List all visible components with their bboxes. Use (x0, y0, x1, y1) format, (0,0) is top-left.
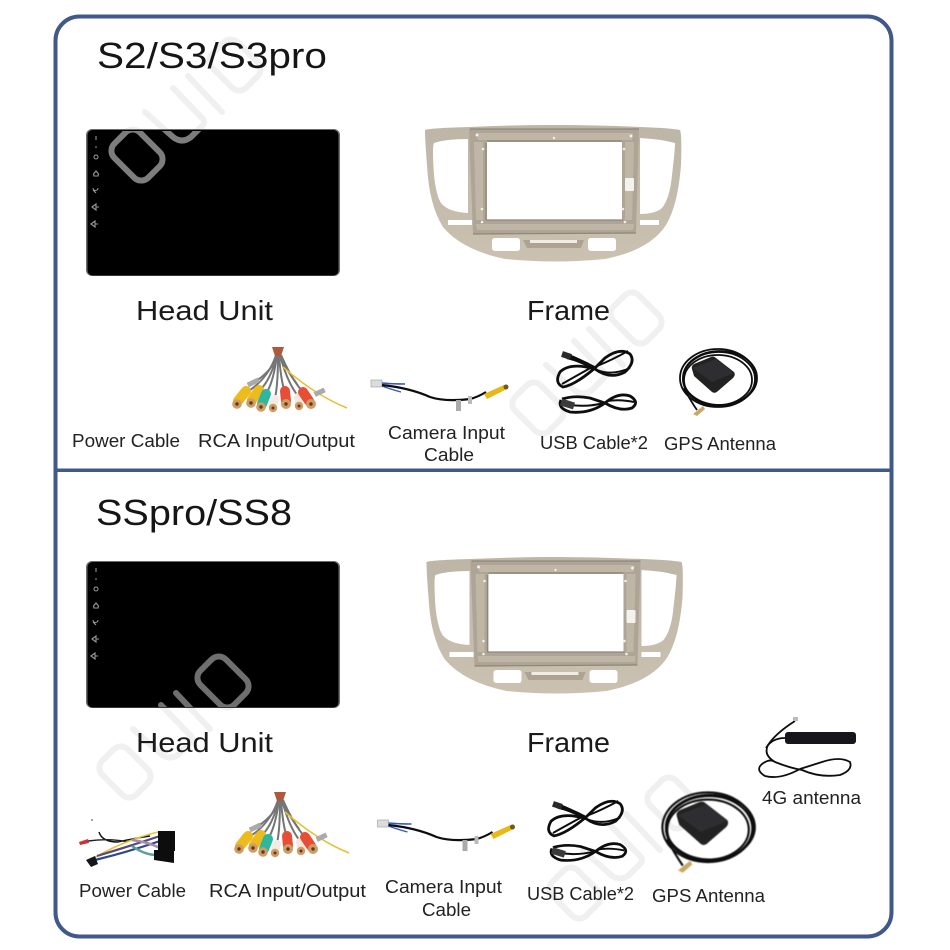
label: power cable: Power Cable (79, 881, 186, 901)
label: camera input cable: Camera Input (388, 423, 505, 443)
label: camera input cable: Camera Input (385, 877, 502, 897)
label: camera input cable: Cable (422, 900, 471, 920)
icon: power cable (79, 819, 175, 867)
icon: 4G antenna (759, 717, 856, 777)
label: GPS antenna: GPS Antenna (652, 886, 766, 906)
title: S2/S3/S3pro: S2/S3/S3pro (97, 35, 327, 76)
watermark: lower right (545, 773, 703, 923)
label: RCA input/output: RCA Input/Output (209, 881, 366, 901)
label: head unit: Head Unit (136, 295, 273, 326)
label: 4G antenna: 4G antenna (762, 788, 862, 808)
icon: camera input cable (378, 820, 515, 851)
icon: USB cables (549, 801, 626, 860)
label: camera input cable: Cable (424, 445, 474, 465)
panel: S2/S3/S3pro (72, 35, 777, 465)
label: GPS antenna: GPS Antenna (664, 434, 777, 454)
watermark: middle (508, 288, 666, 438)
icon: RCA cable (232, 347, 347, 412)
icon: RCA cable (234, 792, 349, 857)
title: SSpro/SS8: SSpro/SS8 (96, 492, 292, 533)
label: RCA input/output: RCA Input/Output (198, 431, 355, 451)
label: USB cable x2: USB Cable*2 (540, 433, 648, 453)
divider (56, 468, 891, 472)
icon: USB cables (558, 351, 636, 412)
frame (426, 557, 683, 694)
panel: SSpro/SS8 (79, 492, 862, 920)
icon: camera input cable (371, 380, 508, 411)
head unit screen (86, 129, 340, 276)
icon: GPS antenna (680, 349, 757, 416)
frame (425, 125, 681, 262)
head unit screen (86, 561, 340, 708)
label: frame: Frame (527, 727, 610, 758)
label: frame: Frame (527, 295, 610, 326)
watermark: lower left (95, 652, 253, 802)
label: USB cable x2: USB Cable*2 (527, 884, 634, 904)
label: head unit: Head Unit (136, 727, 273, 758)
watermark: top left (107, 35, 265, 185)
label: power cable: Power Cable (72, 431, 180, 451)
icon: GPS antenna (662, 792, 755, 873)
